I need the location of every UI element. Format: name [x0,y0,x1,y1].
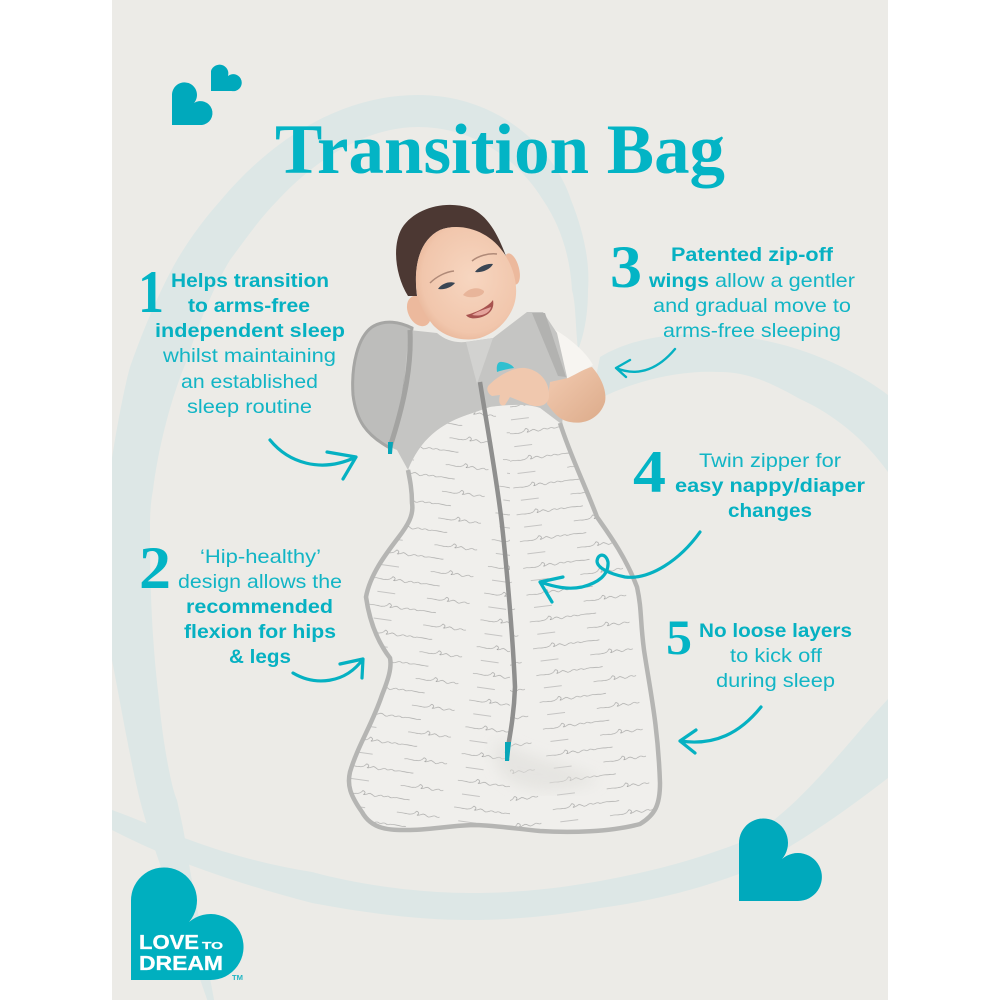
left eyebrow [430,271,454,283]
text block 1: whilst maintaining [162,345,336,367]
photo: baby in transition bag [340,205,680,850]
white t-shirt sleeve [552,328,593,380]
grey yoke [390,312,567,470]
text block 3: and gradual move to [653,295,851,317]
text block 5: No loose layers [699,620,852,642]
bag fold shading [492,744,593,786]
bag grey binding [349,423,660,832]
text block 3: Patented zip-off [671,244,834,266]
panel: background [112,0,888,1000]
text block 5 [699,620,852,692]
number 2: 2 [139,535,171,601]
text block 1 [155,270,345,418]
text block 4: Twin zipper for [699,450,842,472]
logo wordmark [139,932,223,975]
arrow 4 [540,532,700,602]
text block 2: & legs [229,646,291,668]
right eye [475,264,493,272]
text block 1: to arms-free [188,295,310,317]
left eye [438,282,455,289]
icon: bottom right heart [739,818,822,901]
background heart ribbon [112,95,888,1000]
tongue [472,307,491,316]
logo wordmark: TO [202,940,223,952]
text block 4: easy nappy/diaper [675,475,865,497]
number 5: 5 [666,609,692,665]
zipper pull [505,742,511,761]
text block 3: wings [648,270,709,292]
number 4: 4 [633,439,666,505]
text block 2: design allows the [178,571,342,593]
text block 1: an established [181,371,318,393]
icon: large top heart [172,82,212,125]
text block 5: during sleep [716,670,835,692]
right eyebrow [472,254,497,261]
logo wordmark: DREAM [139,953,223,975]
callout 3 [610,234,856,377]
baby arm [547,367,605,423]
callout 5 [666,609,852,753]
teal chest heart [497,362,514,372]
text block 1: independent sleep [155,320,345,342]
text block 1: Helps transition [171,270,329,292]
text block 2 [178,546,342,668]
centre zipper [480,382,515,753]
baby hand [487,368,549,406]
ribbon: left lobe [101,95,588,1000]
text block 4: changes [728,500,812,522]
callout 1 [138,259,356,479]
quilted bag body [346,404,662,834]
baby hair [396,205,506,296]
callout 4 [540,439,865,602]
wing zipper tag [388,442,393,454]
text block 2: recommended [186,596,333,618]
text block 2: ‘Hip-healthy’ [200,546,321,568]
shoulder strap trim [532,313,566,377]
bag script pattern right [510,405,652,827]
wing zip seam [390,330,410,447]
collar placket [466,338,493,384]
text block 3: arms-free sleeping [663,320,841,342]
trademark: TM [232,975,243,982]
left ear [402,292,436,330]
title: Transition Bag [275,111,725,189]
baby face [416,227,516,339]
arrow 5 [680,707,761,753]
icon: small top heart [211,65,242,91]
text block 3: allow a gentler [715,270,856,292]
nose [463,288,484,297]
text block 4 [675,450,865,522]
bag script pattern left [351,412,510,827]
number 1: 1 [138,259,164,325]
ribbon: right lobe and base [112,334,888,920]
smile [466,300,493,318]
arrow 2 [293,659,363,681]
callout 2 [139,535,363,681]
logo heart [131,867,244,980]
logo wordmark: LOVE [139,932,199,954]
arrow 3 [616,349,675,377]
text block 5: to kick off [730,645,823,667]
logo: Love to Dream [131,867,244,982]
right ear [501,252,523,286]
text block 3 [648,244,856,342]
arrow 1 [270,440,356,479]
text block 1: sleep routine [187,396,312,418]
sleeve wing [353,322,412,448]
text block 2: flexion for hips [184,621,336,643]
number 3: 3 [610,234,642,300]
